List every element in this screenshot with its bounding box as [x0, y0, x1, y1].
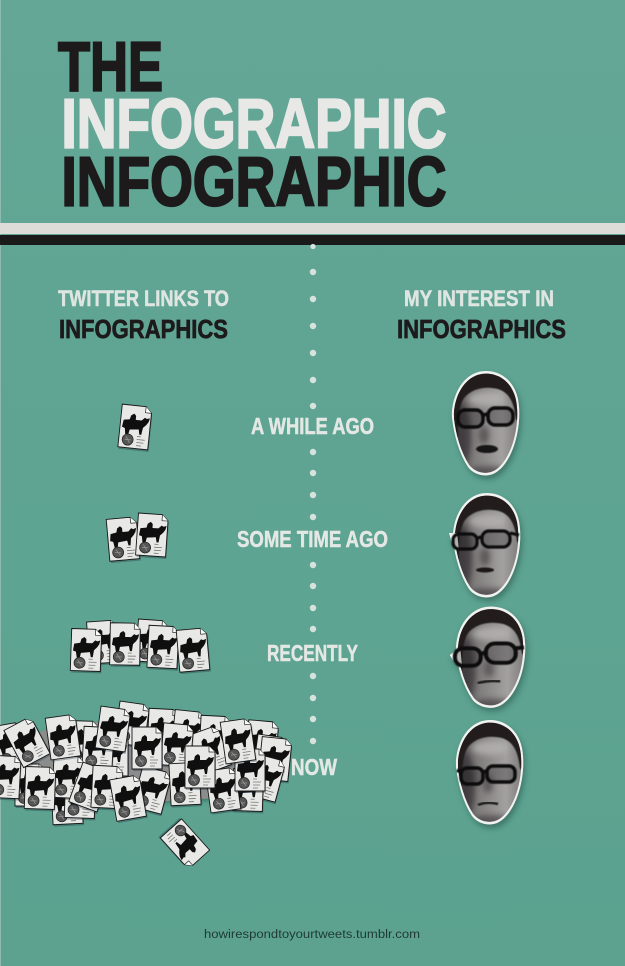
header divider bars — [0, 223, 625, 245]
mouth — [478, 681, 500, 683]
mouth — [478, 803, 498, 805]
mouth — [476, 568, 494, 572]
source credit: howirespondtoyourtweets.tumblr.com — [204, 929, 420, 941]
face: a while ago — [444, 363, 528, 483]
timeline label: some time ago: SOME TIME AGO — [237, 526, 388, 552]
document icons: recently — [70, 619, 211, 674]
mouth — [476, 445, 498, 453]
right column heading: MY INTEREST IN — [404, 286, 554, 311]
right column heading: INFOGRAPHICS — [397, 314, 566, 344]
title: THE — [58, 28, 163, 106]
title — [58, 28, 446, 220]
document icon: a while ago — [118, 404, 153, 452]
glasses — [458, 408, 513, 427]
left column heading: TWITTER LINKS TO — [58, 286, 229, 311]
face: now — [448, 712, 532, 832]
title: INFOGRAPHIC — [62, 142, 446, 220]
title: INFOGRAPHIC — [62, 84, 446, 162]
timeline label: a while ago: A WHILE AGO — [251, 413, 374, 439]
document icons: some time ago — [106, 513, 169, 563]
timeline label: recently: RECENTLY — [267, 640, 358, 666]
right column heading — [397, 286, 566, 344]
timeline label: now: NOW — [291, 754, 337, 780]
glasses — [455, 643, 524, 666]
glasses — [457, 766, 515, 784]
document pile: now — [0, 701, 293, 827]
left column heading: INFOGRAPHICS — [59, 314, 228, 344]
dotted timeline — [310, 244, 316, 744]
glasses — [453, 531, 519, 549]
left column heading — [58, 286, 229, 344]
earpiece outline — [450, 647, 462, 667]
face: recently — [448, 599, 534, 715]
stray document icon — [158, 817, 210, 870]
face: some time ago — [445, 485, 529, 605]
earpiece outline — [449, 533, 459, 550]
